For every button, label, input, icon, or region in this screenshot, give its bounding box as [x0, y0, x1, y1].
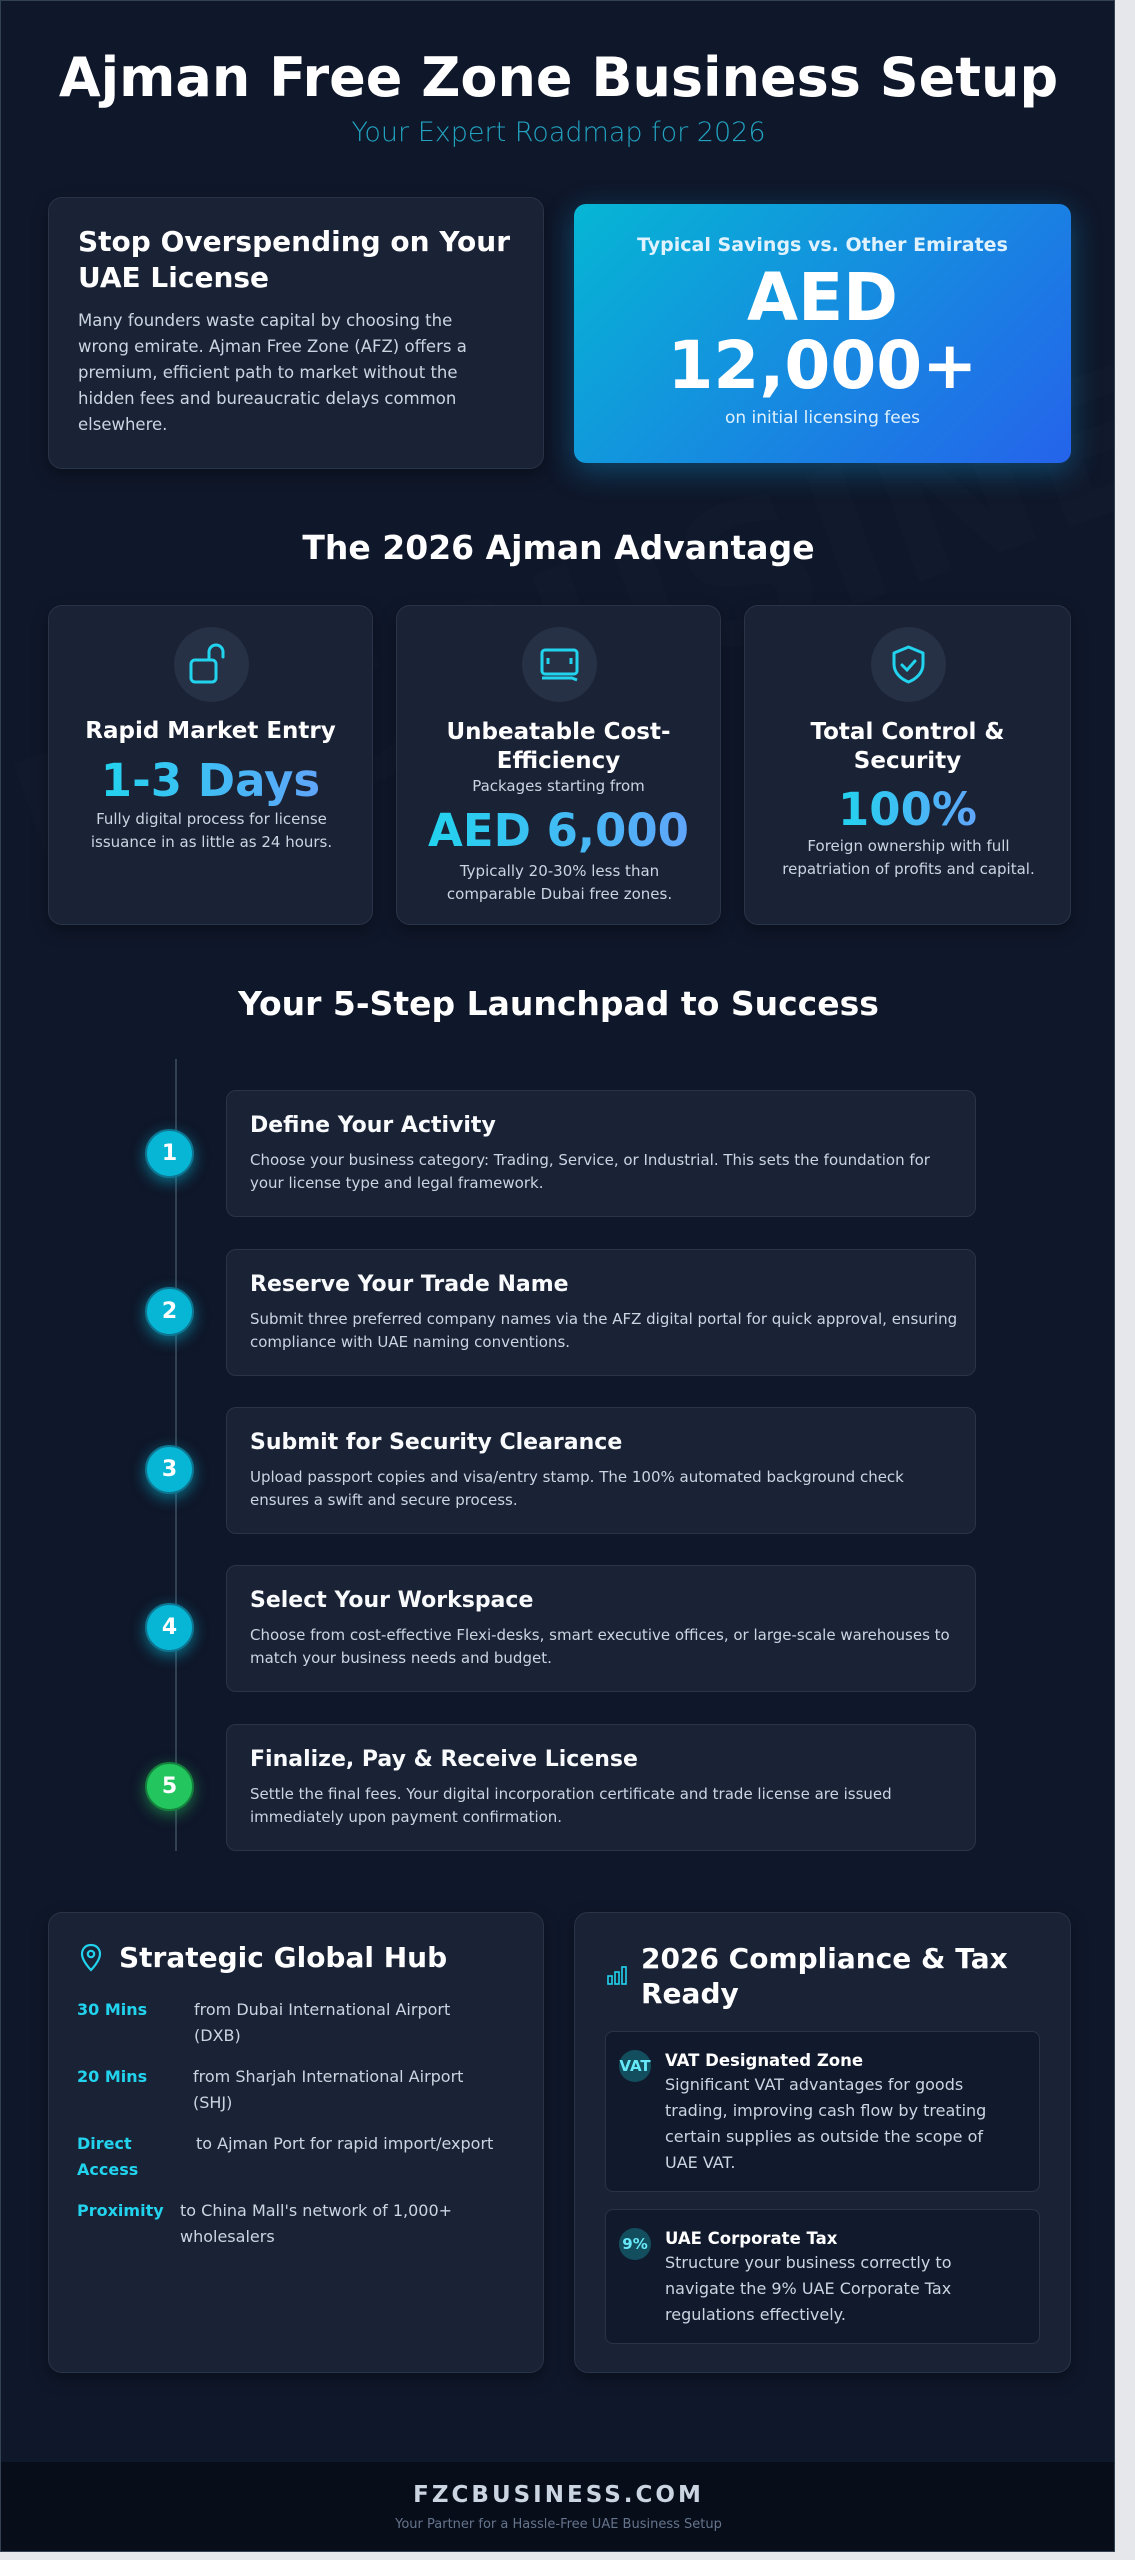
step 3: Upload passport copies and visa/entry stamp. The 100% automated background check ensures a swift and secure process.: [250, 1468, 904, 1509]
panel: intro: [48, 197, 544, 469]
panel: control & security: 100%: [838, 783, 977, 836]
step 2 number: 2: [162, 1299, 177, 1324]
panel: control & security: Total Control &: [810, 719, 1004, 745]
step 4 number: 4: [162, 1615, 177, 1640]
savings number: [668, 259, 978, 404]
icon: pin: [80, 1944, 102, 1972]
panel: cost efficiency: Efficiency: [497, 748, 620, 774]
hub item 1: [77, 2000, 450, 2045]
hub item 2: [77, 2067, 463, 2112]
savings number: AED: [747, 259, 898, 336]
step 4 number: [145, 1603, 194, 1652]
panel: cost efficiency: Packages starting from: [472, 777, 645, 795]
corporate tax box: 9%: [622, 2235, 648, 2253]
step 5: [226, 1724, 976, 1851]
panel: control & security: Security: [854, 748, 961, 774]
panel: rapid market entry: [48, 605, 373, 925]
footer tagline: Your Partner for a Hassle-Free UAE Business Setup: [395, 2517, 722, 2532]
compliance heading: [641, 1942, 1008, 2010]
panel: control & security: [744, 605, 1071, 925]
panel: rapid market entry: Fully digital process for license issuance in as little as 24 hours.: [91, 810, 332, 851]
VAT box: VAT Designated Zone: [665, 2051, 863, 2070]
corporate tax box: Structure your business correctly to navigate the 9% UAE Corporate Tax regulations effectively.: [665, 2253, 951, 2324]
subtitle: Your Expert Roadmap for 2026: [351, 117, 766, 148]
icon: bars: [607, 1966, 627, 1985]
footer: [1, 2462, 1116, 2553]
intro text: Many founders waste capital by choosing the wrong emirate. Ajman Free Zone (AFZ) offers a premium, efficient path to market without the hidden fees and bureaucratic delays common elsewhere.: [78, 311, 467, 434]
hub item 3: [77, 2134, 493, 2179]
panel: cost efficiency: AED 6,000: [428, 804, 689, 857]
icon: shield: [871, 627, 946, 702]
timeline: [175, 1059, 177, 1851]
panel: cost efficiency: Typically 20-30% less than comparable Dubai free zones.: [447, 862, 672, 903]
compliance heading: 2026 Compliance & Tax: [641, 1942, 1008, 1975]
heading: advantage: The 2026 Ajman Advantage: [302, 528, 815, 567]
hub heading: Strategic Global Hub: [119, 1941, 447, 1974]
step 4: Choose from cost-effective Flexi-desks, smart executive offices, or large-scale warehouses to match your business needs and budget.: [250, 1626, 950, 1667]
hub item 3: Access: [77, 2160, 138, 2179]
step 2: Reserve Your Trade Name: [250, 1272, 569, 1297]
step 2: [226, 1249, 976, 1376]
step 1 number: 1: [162, 1141, 177, 1166]
step 5: Settle the final fees. Your digital incorporation certificate and trade license are issued immediately upon payment confirmation.: [250, 1785, 892, 1826]
hub item 3: to Ajman Port for rapid import/export: [196, 2134, 493, 2153]
hub item 1: 30 Mins: [77, 2000, 147, 2019]
step 4: [226, 1565, 976, 1692]
icon: unlock: [174, 627, 249, 702]
step 5: Finalize, Pay & Receive License: [250, 1747, 638, 1772]
savings number: 12,000+: [668, 327, 978, 404]
hub item 1: from Dubai International Airport (DXB): [194, 2000, 450, 2045]
VAT box: Significant VAT advantages for goods trading, improving cash flow by treating certain supplies as outside the scope of UAE VAT.: [665, 2075, 986, 2172]
heading: steps: Your 5-Step Launchpad to Success: [238, 984, 879, 1023]
compliance heading: Ready: [641, 1977, 739, 2010]
step 1: [226, 1090, 976, 1217]
panel: savings callout: on initial licensing fees: [725, 408, 920, 428]
title: Ajman Free Zone Business Setup: [59, 46, 1058, 109]
step 5 number: 5: [162, 1774, 177, 1799]
panel: strategic hub: [48, 1912, 544, 2373]
intro heading: Stop Overspending on Your UAE License: [78, 225, 510, 294]
VAT box: [605, 2031, 1040, 2192]
hub item 3: Direct: [77, 2134, 132, 2153]
panel: savings callout: Typical Savings vs. Other Emirates: [637, 234, 1008, 256]
corporate tax box: UAE Corporate Tax: [665, 2229, 837, 2248]
hub item 4: Proximity: [77, 2201, 164, 2220]
step 3 number: 3: [162, 1457, 177, 1482]
step 1: Choose your business category: Trading, Service, or Industrial. This sets the foundation for your license type and legal framework.: [250, 1151, 930, 1192]
step 1 number: [145, 1129, 194, 1178]
step 3 number: [145, 1445, 194, 1494]
hub item 2: from Sharjah International Airport (SHJ): [193, 2067, 463, 2112]
panel: cost efficiency: Unbeatable Cost-: [446, 719, 670, 745]
hub item 4: to China Mall's network of 1,000+ wholesalers: [180, 2201, 452, 2246]
panel: savings callout: [574, 204, 1071, 463]
panel: rapid market entry: Rapid Market Entry: [85, 718, 336, 744]
step 2: Submit three preferred company names via the AFZ digital portal for quick approval, ensuring compliance with UAE naming conventions.: [250, 1310, 957, 1351]
step 2 number: [145, 1287, 194, 1336]
VAT box: VAT: [619, 2057, 651, 2075]
panel: compliance: [574, 1912, 1071, 2373]
step 3: [226, 1407, 976, 1534]
step 3: Submit for Security Clearance: [250, 1430, 622, 1455]
footer brand: FZCBUSINESS.COM: [413, 2482, 704, 2508]
corporate tax box: [605, 2209, 1040, 2344]
panel: cost efficiency: [396, 605, 721, 925]
icon: money: [522, 627, 597, 702]
panel: rapid market entry: 1-3 Days: [101, 754, 320, 807]
panel: control & security: Foreign ownership with full repatriation of profits and capital.: [782, 837, 1035, 878]
hub item 2: 20 Mins: [77, 2067, 147, 2086]
step 4: Select Your Workspace: [250, 1588, 533, 1613]
step 1: Define Your Activity: [250, 1113, 496, 1138]
step 5 number: [145, 1762, 194, 1811]
